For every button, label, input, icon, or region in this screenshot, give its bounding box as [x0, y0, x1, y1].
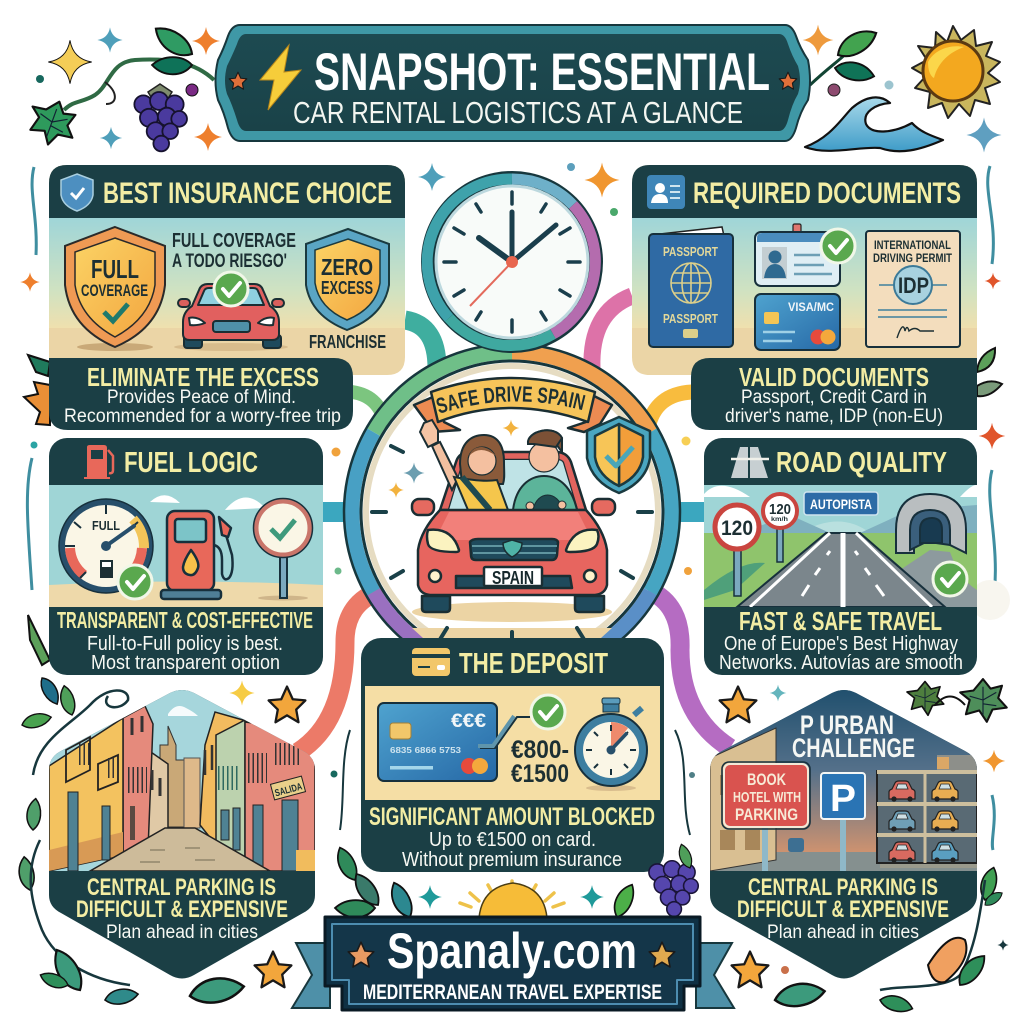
autopista sign: [804, 492, 878, 515]
check badge: [821, 229, 855, 263]
ribbon tails: [292, 943, 734, 1008]
badge rim: [352, 352, 672, 672]
challenge title: CHALLENGE: [792, 733, 915, 763]
panel header: [632, 165, 977, 218]
coverage label: A TODO RIESGO': [172, 251, 287, 272]
caption: [719, 606, 963, 674]
leaves above plaque left: [332, 845, 361, 884]
title banner: [216, 25, 810, 141]
international driving permit: DRIVING PERMIT: [873, 253, 952, 265]
fuel gauge: [59, 499, 153, 593]
zero excess shield: [306, 229, 389, 330]
amount: [511, 736, 569, 788]
amount: €800-: [511, 736, 569, 764]
panel: central parking hexagon left: [49, 687, 315, 978]
caption: Networks. Autovías are smooth: [719, 652, 963, 674]
sparkles around clock: [332, 162, 692, 575]
caption: DIFFICULT & EXPENSIVE: [76, 896, 288, 923]
check sign: [254, 498, 312, 600]
parking sign: [821, 773, 865, 871]
tagline: MEDITERRANEAN TRAVEL EXPERTISE: [363, 981, 662, 1004]
decoration: top-left vine and grapes: [22, 22, 222, 152]
full coverage shield: COVERAGE: [81, 281, 148, 300]
stopwatch: [575, 698, 647, 791]
plate text: SPAIN: [492, 568, 534, 588]
check badge: [214, 272, 248, 306]
caption: Up to €1500 on card.: [429, 829, 596, 851]
connector: insurance: [405, 320, 437, 368]
caption: [369, 803, 655, 871]
full coverage shield: FULL: [91, 254, 139, 284]
banner text: SAFE DRIVE SPAIN: [436, 386, 586, 413]
icon: id card: [647, 175, 685, 209]
badge shield: [587, 417, 650, 493]
main car: [412, 499, 615, 612]
caption: [737, 874, 949, 943]
credit card: [755, 294, 840, 350]
scene: [49, 485, 323, 607]
id card: [755, 224, 840, 286]
parking sign: P: [830, 778, 856, 820]
panel: required documents: [632, 165, 977, 430]
panel: road quality: [704, 438, 977, 675]
speed sign small: km/h: [771, 517, 788, 523]
caption: Passport, Credit Card in: [741, 387, 927, 408]
connector arcs: [298, 296, 730, 752]
challenge title: P URBAN: [800, 710, 894, 740]
caption: VALID DOCUMENTS: [739, 362, 929, 392]
panel: best insurance choice: [49, 165, 405, 430]
hotel sign: PARKING: [735, 805, 798, 824]
icon: lightning bolt: [260, 45, 301, 110]
full coverage shield: [65, 227, 165, 351]
panel: fuel logic: [49, 438, 323, 675]
autopista sign: AUTOPISTA: [810, 496, 872, 512]
speed sign small: [763, 494, 797, 562]
fuel gauge: FULL: [92, 518, 120, 533]
amount: €1500: [511, 760, 569, 788]
caption: FAST & SAFE TRAVEL: [739, 606, 942, 636]
central badge: [342, 346, 682, 638]
hotel sign: [722, 762, 810, 871]
pointer: [480, 717, 530, 748]
scene: [704, 485, 977, 607]
title ornaments: [229, 72, 797, 89]
caption: Without premium insurance: [402, 849, 622, 871]
caption: Provides Peace of Mind.: [107, 387, 296, 408]
caption: Most transparent option: [91, 652, 280, 674]
connector: old town: [298, 590, 382, 752]
passport: PASSPORT: [663, 311, 718, 326]
caption: [76, 874, 288, 943]
badge ground: [412, 602, 612, 622]
vine center-right: [675, 730, 690, 835]
passport: PASSPORT: [663, 244, 718, 259]
subtitle text: CAR RENTAL LOGISTICS AT A GLANCE: [293, 95, 743, 130]
far tower and houses: [160, 726, 184, 828]
banner: [414, 378, 612, 432]
passport: [649, 227, 733, 347]
coverage label: [172, 230, 296, 272]
icon: shield: [61, 174, 93, 211]
icon: card: [412, 648, 450, 676]
connector: insurance caption: [352, 392, 386, 428]
vine top-left of street: [33, 690, 128, 775]
challenge title: [792, 710, 915, 763]
shop sign text: SALIDA: [274, 781, 304, 799]
decoration: top-right leaves, sun and wave: [803, 24, 1002, 153]
credit card: VISA/MC: [788, 300, 834, 314]
connector: road: [676, 502, 705, 522]
title text: SNAPSHOT: ESSENTIAL: [314, 43, 770, 102]
caption: DIFFICULT & EXPENSIVE: [737, 896, 949, 923]
speed sign large: [715, 505, 759, 596]
credit card: 6835 6866 5753: [390, 746, 462, 755]
international driving permit: IDP: [898, 273, 929, 298]
caption: CENTRAL PARKING IS: [748, 874, 938, 901]
caption: TRANSPARENT & COST-EFFECTIVE: [57, 607, 313, 633]
plaque stars: [348, 942, 675, 967]
car windshield frame: [440, 452, 586, 510]
speed sign large: 120: [721, 517, 753, 540]
vine right-bottom: [992, 795, 994, 850]
zero excess shield: ZERO: [321, 254, 373, 280]
connector: urban challenge: [648, 590, 730, 748]
international driving permit: [866, 231, 960, 347]
check badge: [118, 565, 152, 599]
vine center-left: [340, 730, 350, 830]
icon: highway: [731, 447, 769, 478]
caption: [691, 358, 977, 430]
insured car: [174, 284, 288, 351]
decoration: stars, leaves and vines around the hexagons: [16, 674, 1009, 1015]
heading: ROAD QUALITY: [776, 447, 947, 479]
connector: fuel: [322, 502, 350, 522]
speed sign small: 120: [769, 501, 791, 518]
sparkles: [404, 462, 424, 484]
credit card: €€€: [451, 711, 486, 732]
ivy top-right of urban hexagon: [907, 682, 944, 715]
city scene: [710, 687, 978, 872]
icon: fuel pump: [84, 445, 113, 478]
caption: Plan ahead in cities: [767, 922, 919, 943]
connector: documents caption: [648, 392, 692, 428]
caption: driver's name, IDP (non-EU): [725, 406, 943, 427]
heading: THE DEPOSIT: [459, 648, 608, 680]
decoration: side squiggles and leaves: [20, 166, 1010, 665]
franchise label: FRANCHISE: [309, 332, 386, 352]
heading: BEST INSURANCE CHOICE: [103, 177, 392, 210]
vine left-bottom: [26, 798, 42, 831]
caption: One of Europe's Best Highway: [724, 633, 958, 655]
street scene: [49, 687, 315, 871]
hotel sign: BOOK: [747, 770, 787, 789]
caption: Plan ahead in cities: [106, 922, 258, 943]
tunnel: [896, 494, 966, 553]
zero excess shield: EXCESS: [321, 278, 373, 298]
badge clock ticks: [372, 446, 652, 646]
caption: ELIMINATE THE EXCESS: [87, 362, 319, 392]
fuel pump: [161, 511, 233, 599]
people in car: [420, 420, 577, 510]
credit card: [378, 703, 497, 781]
panel: urban challenge hexagon right: [710, 687, 978, 978]
caption: Recommended for a worry-free trip: [64, 406, 341, 427]
check badge: [531, 695, 565, 729]
brand name: Spanaly.com: [387, 923, 637, 979]
caption: SIGNIFICANT AMOUNT BLOCKED: [369, 803, 655, 831]
clock: [421, 171, 603, 353]
caption: [49, 358, 353, 430]
panel: the deposit: [361, 638, 664, 872]
footer plaque: [292, 917, 734, 1010]
hotel sign: HOTEL WITH: [733, 789, 801, 806]
heading: FUEL LOGIC: [124, 447, 258, 479]
check badge: [933, 562, 967, 596]
sun above plaque: [460, 881, 564, 918]
caption: CENTRAL PARKING IS: [87, 874, 276, 901]
connector: documents: [592, 296, 632, 368]
caption: [57, 607, 313, 674]
international driving permit: INTERNATIONAL: [874, 240, 951, 252]
panel header: [49, 165, 405, 218]
coverage label: FULL COVERAGE: [172, 230, 296, 252]
caption: Full-to-Full policy is best.: [87, 633, 283, 655]
